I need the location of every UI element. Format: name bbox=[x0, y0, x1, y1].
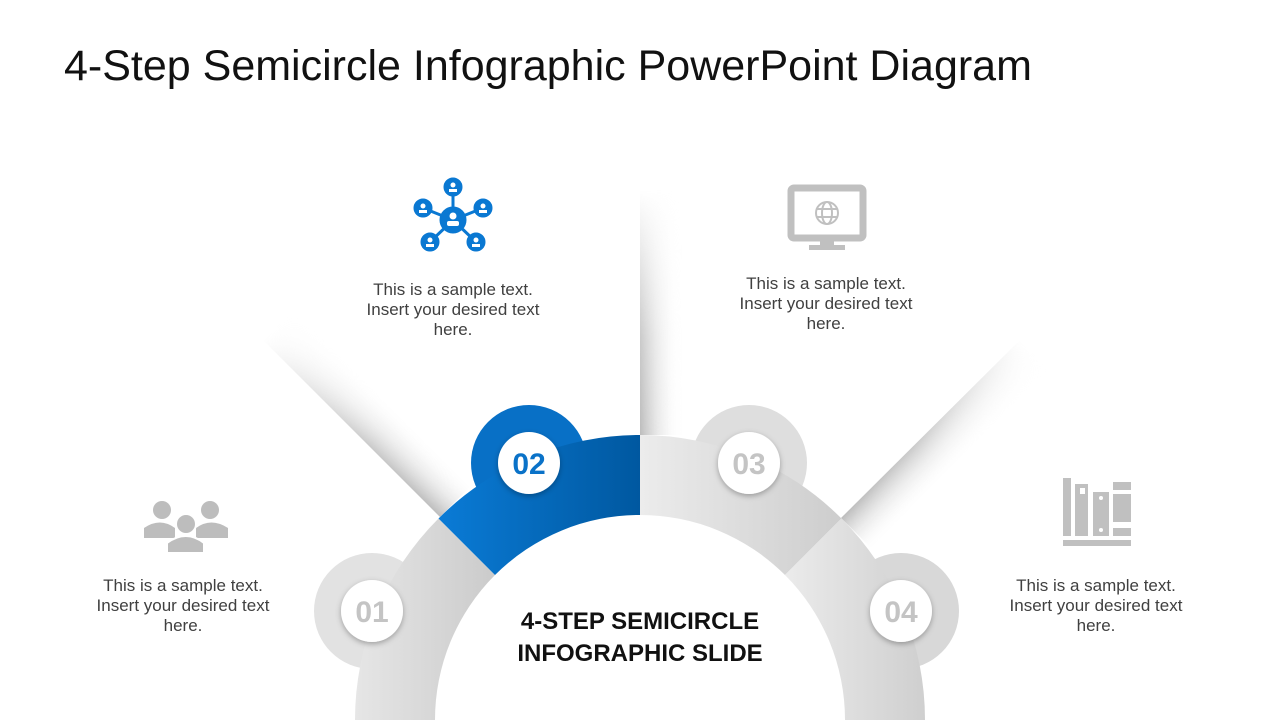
text 01 bbox=[97, 576, 270, 635]
beam: center bbox=[640, 213, 668, 435]
badge 02: 02 bbox=[512, 448, 546, 481]
text 02 bbox=[367, 280, 540, 339]
center title: INFOGRAPHIC SLIDE bbox=[517, 640, 763, 667]
segment 04 bbox=[785, 518, 959, 720]
text 03: Insert your desired text bbox=[740, 294, 912, 313]
text 01: This is a sample text. bbox=[103, 576, 263, 595]
text 03: This is a sample text. bbox=[746, 274, 906, 293]
beam: right bbox=[841, 358, 1003, 538]
text 04 bbox=[1010, 576, 1182, 635]
title: 4-Step Semicircle Infographic PowerPoint Diagram bbox=[64, 42, 1032, 90]
icon: monitor bbox=[791, 188, 863, 250]
text 01: here. bbox=[164, 616, 202, 635]
text 04: here. bbox=[1077, 616, 1115, 635]
text 04: This is a sample text. bbox=[1016, 576, 1176, 595]
segment 02 bbox=[438, 405, 640, 575]
segment 01 bbox=[314, 518, 495, 720]
text 03: here. bbox=[807, 314, 845, 333]
icon: people bbox=[144, 501, 228, 553]
beam: left bbox=[280, 356, 460, 517]
center title: 4-STEP SEMICIRCLE bbox=[521, 608, 759, 635]
text 04: Insert your desired text bbox=[1010, 596, 1182, 615]
text 02: Insert your desired text bbox=[367, 300, 539, 319]
segment 03 bbox=[640, 405, 842, 575]
badge 03 bbox=[718, 432, 780, 494]
badge 01 bbox=[341, 580, 403, 642]
text 01: Insert your desired text bbox=[97, 596, 269, 615]
center title bbox=[517, 608, 763, 667]
badge 04 bbox=[870, 580, 932, 642]
text 03 bbox=[740, 274, 912, 333]
badge 01: 01 bbox=[355, 596, 389, 629]
badge 03: 03 bbox=[732, 448, 766, 481]
icon: network bbox=[415, 179, 491, 250]
text 02: This is a sample text. bbox=[373, 280, 533, 299]
diagram bbox=[144, 178, 1131, 720]
icon: books bbox=[1063, 478, 1131, 546]
badge 02 bbox=[498, 432, 560, 494]
text 02: here. bbox=[434, 320, 472, 339]
badge 04: 04 bbox=[884, 596, 918, 629]
